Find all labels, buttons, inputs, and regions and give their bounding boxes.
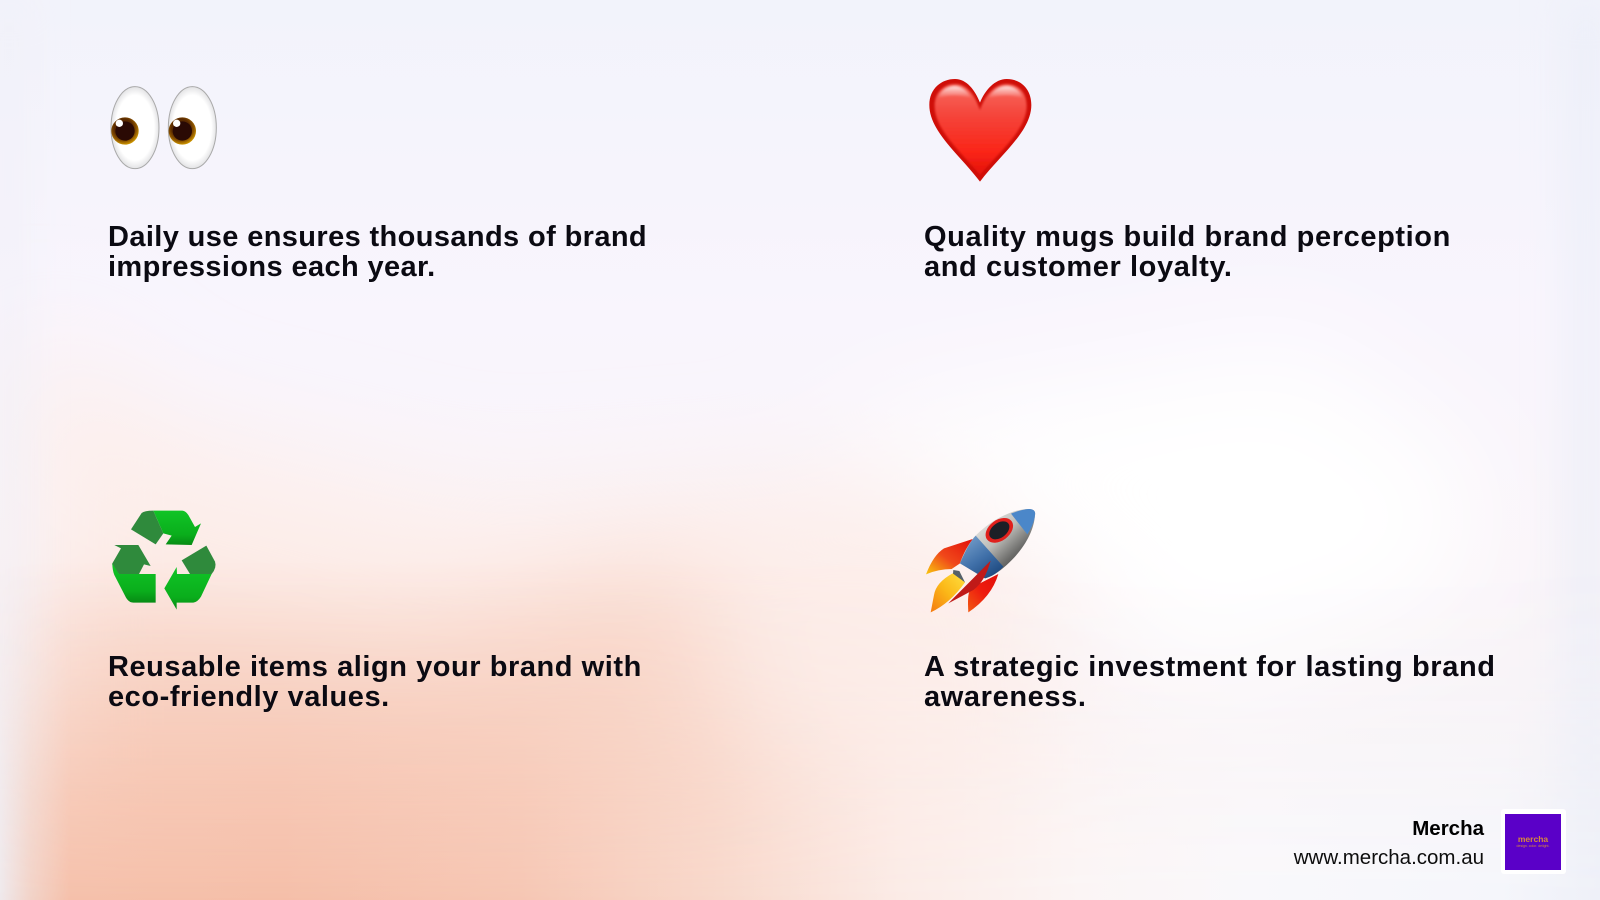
fins: [926, 539, 973, 574]
icon: heart: [929, 79, 1032, 182]
footer: brand: [1294, 809, 1566, 874]
item: quality mugs: [924, 79, 1451, 283]
text: reusable items: eco-friendly values.: [108, 681, 390, 713]
text: strategic investment: [924, 651, 1496, 713]
text: quality mugs: Quality mugs build brand perception: [924, 221, 1451, 253]
logo: design. color. delight.: [1517, 844, 1549, 848]
text: quality mugs: [924, 221, 1451, 283]
text: reusable items: [108, 651, 642, 713]
flame: [931, 573, 965, 612]
text: strategic investment: awareness.: [924, 681, 1087, 713]
item: daily impressions: [108, 86, 647, 283]
text: quality mugs: and customer loyalty.: [924, 251, 1233, 283]
icon: eyes: [110, 86, 217, 170]
nozzle: [953, 570, 965, 584]
text: daily use: [108, 221, 647, 283]
item: strategic investment: [924, 509, 1496, 713]
brand name: Mercha: [1412, 817, 1484, 840]
item: reusable items: [108, 510, 642, 713]
icon: rocket: [926, 509, 1036, 612]
website: www.mercha.com.au: [1294, 846, 1484, 869]
text: reusable items: Reusable items align your brand with: [108, 651, 642, 683]
text: strategic investment: A strategic investment for lasting brand: [924, 651, 1496, 683]
logo: mercha: [1518, 834, 1548, 844]
body: [960, 509, 1035, 578]
text: daily use: impressions each year.: [108, 251, 436, 283]
logo: [1501, 809, 1566, 874]
icon: recycling: [112, 510, 216, 610]
text: daily use: Daily use ensures thousands of brand: [108, 221, 647, 253]
